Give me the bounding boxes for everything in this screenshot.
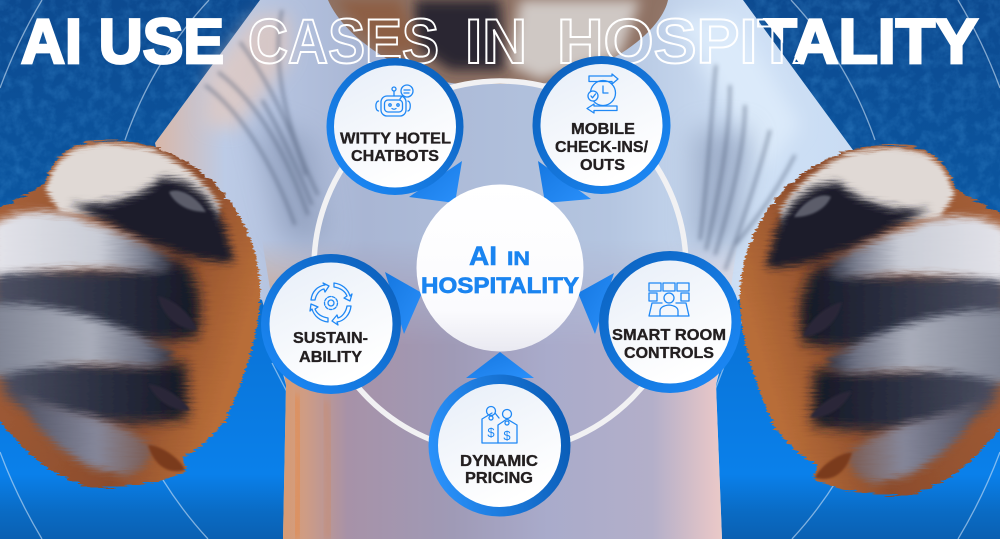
node: witty hotel chatbots <box>326 58 464 195</box>
icon: price tags <box>482 406 517 443</box>
icon: robot chatbot <box>376 85 413 116</box>
node: dynamic pricing: $ <box>487 425 495 440</box>
icon: operator at control panels <box>649 283 689 316</box>
title: AI USE CASES IN HOSPITALITY <box>20 17 980 65</box>
icon: clock with arrows <box>587 74 618 113</box>
node: dynamic pricing <box>428 374 570 516</box>
node: sustainability <box>261 254 401 394</box>
title: AI USE CASES IN HOSPITALITY: CASES <box>248 7 439 77</box>
title: AI USE CASES IN HOSPITALITY: HOSPITALITY <box>557 7 978 77</box>
node: smart room controls <box>599 251 741 393</box>
right bear paw <box>740 145 1000 496</box>
node: witty hotel chatbots: WITTY HOTEL <box>340 130 451 148</box>
connecting ring <box>314 81 686 453</box>
node: sustainability: SUSTAIN- <box>293 330 368 347</box>
node: dynamic pricing: $ <box>503 428 511 443</box>
centre circle: AI in hospitality: IN <box>507 249 530 270</box>
node: smart room controls: SMART ROOM <box>612 327 726 344</box>
white t-shirt <box>155 0 853 539</box>
icon: gear with cycling arrows <box>310 283 352 325</box>
arrow: smart room controls to centre <box>578 273 614 334</box>
arrow: dynamic pricing to centre <box>466 352 534 378</box>
left bear paw <box>0 141 260 488</box>
title: AI USE CASES IN HOSPITALITY: AI USE <box>21 7 224 77</box>
node: witty hotel chatbots: CHATBOTS <box>351 148 439 165</box>
title: AI USE CASES IN HOSPITALITY: HOSPITALITY <box>557 7 978 77</box>
node: dynamic pricing: PRICING <box>465 470 533 487</box>
node: smart room controls: CONTROLS <box>624 345 714 362</box>
node: mobile check-ins/outs: OUTS <box>580 157 625 174</box>
arrow: sustainability to centre <box>385 272 422 334</box>
node: mobile check-ins/outs: CHECK-INS/ <box>555 139 649 156</box>
node: sustainability: ABILITY <box>299 349 362 366</box>
node: mobile check-ins/outs <box>532 56 670 194</box>
node: mobile check-ins/outs: MOBILE <box>571 121 635 138</box>
centre circle: AI in hospitality <box>416 184 584 352</box>
centre circle: AI in hospitality: AI <box>469 241 497 271</box>
bear neck fur <box>300 0 700 95</box>
arrow: chatbots to centre <box>409 161 462 203</box>
node: dynamic pricing: DYNAMIC <box>460 453 538 470</box>
arrow: mobile check-ins to centre <box>538 161 591 203</box>
centre circle: AI in hospitality: HOSPITALITY <box>421 273 579 298</box>
title: AI USE CASES IN HOSPITALITY: IN <box>465 7 527 77</box>
